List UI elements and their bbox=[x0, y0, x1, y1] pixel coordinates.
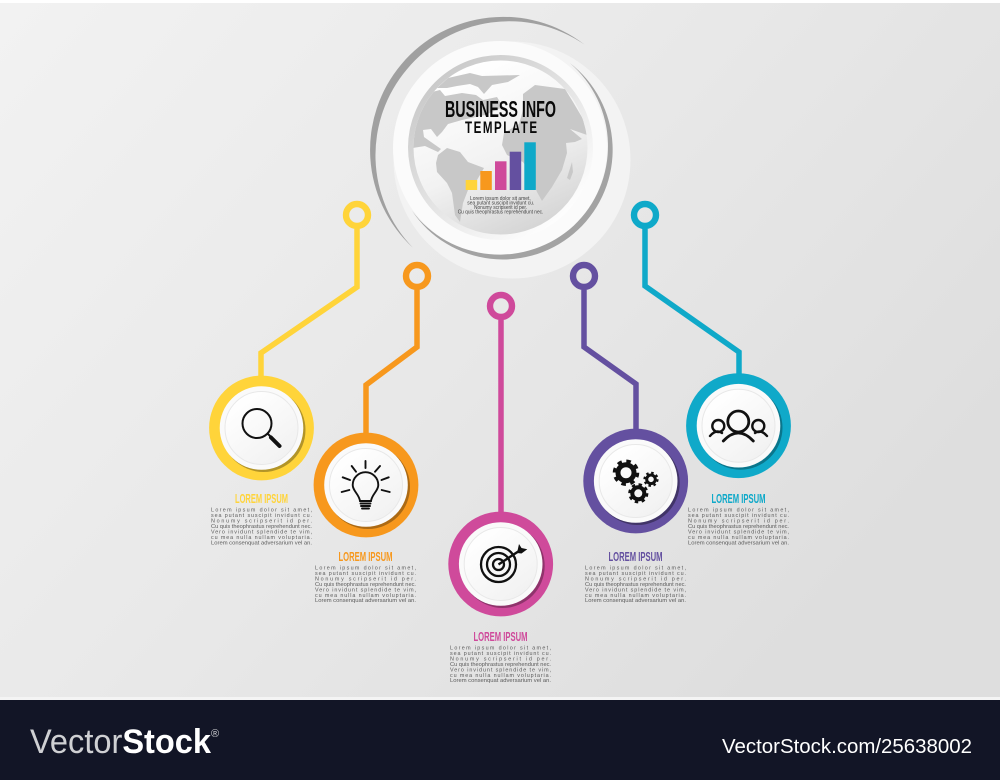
body bbox=[315, 566, 416, 604]
badge text: Lorem ipsum dolor sit amet, bbox=[470, 196, 531, 202]
heading: LOREM IPSUM bbox=[474, 629, 528, 644]
text block: yellow bbox=[211, 491, 312, 546]
body: sea putant suscipit invidunt cu. bbox=[688, 513, 789, 519]
node: purple bbox=[583, 429, 688, 533]
body: cu mea nulla nullam voluptaria. bbox=[450, 673, 551, 679]
badge text: sea putant suscipit invidunt cu. bbox=[467, 200, 534, 206]
body: Lorem consenquat adversarium vel an. bbox=[315, 598, 416, 604]
icon: light bulb bbox=[342, 461, 390, 508]
body: Nonumy scripserit id per. bbox=[315, 576, 416, 582]
body: Cu quis theophrastus reprehendunt nec. bbox=[211, 524, 312, 530]
connector: blue bbox=[634, 204, 739, 376]
body bbox=[688, 508, 790, 546]
body: Vero invidunt splendide te vim, bbox=[315, 587, 416, 593]
body: Vero invidunt splendide te vim, bbox=[585, 587, 686, 593]
body: Lorem ipsum dolor sit amet, bbox=[585, 566, 686, 572]
connector: orange bbox=[366, 265, 428, 435]
body: sea putant suscipit invidunt cu. bbox=[585, 571, 686, 577]
footer logo: VectorStock bbox=[30, 723, 211, 761]
text block: purple bbox=[585, 549, 686, 604]
inner crescent bottom-right bbox=[412, 63, 613, 259]
heading: LOREM IPSUM bbox=[338, 549, 392, 564]
body: Vero invidunt splendide te vim, bbox=[688, 530, 790, 536]
body: Nonumy scripserit id per. bbox=[688, 519, 789, 525]
text block: blue bbox=[688, 491, 790, 546]
body: Cu quis theophrastus reprehendunt nec. bbox=[315, 582, 416, 588]
body: cu mea nulla nullam voluptaria. bbox=[211, 535, 312, 541]
body: Lorem ipsum dolor sit amet, bbox=[688, 508, 790, 514]
bar chart bbox=[466, 142, 536, 190]
connector: purple bbox=[573, 265, 636, 431]
node: pink bbox=[448, 512, 553, 616]
subtitle: TEMPLATE bbox=[465, 119, 537, 138]
badge text bbox=[458, 196, 543, 216]
icon: people bbox=[710, 411, 767, 441]
text block: orange bbox=[315, 549, 416, 604]
body: Cu quis theophrastus reprehendunt nec. bbox=[688, 524, 789, 530]
body: Cu quis theophrastus reprehendunt nec. bbox=[450, 662, 551, 668]
body: Nonumy scripserit id per. bbox=[585, 576, 686, 582]
body bbox=[211, 508, 312, 546]
registered mark: ® bbox=[211, 728, 219, 740]
text block: pink bbox=[450, 629, 552, 684]
icon: magnifier bbox=[242, 409, 280, 446]
footer band bbox=[0, 697, 1000, 780]
body: Lorem consenquat adversarium vel an. bbox=[450, 678, 551, 684]
body: cu mea nulla nullam voluptaria. bbox=[315, 593, 416, 599]
heading: LOREM IPSUM bbox=[235, 491, 288, 506]
body: sea putant suscipit invidunt cu. bbox=[211, 513, 312, 519]
body: sea putant suscipit invidunt cu. bbox=[315, 571, 416, 577]
central globe badge bbox=[370, 17, 630, 279]
badge text: Cu quis theophrastus reprehendunt nec. bbox=[458, 210, 543, 216]
body: Vero invidunt splendide te vim, bbox=[211, 530, 312, 536]
heading: LOREM IPSUM bbox=[712, 491, 766, 506]
body: Lorem consenquat adversarium vel an. bbox=[688, 540, 789, 546]
node: orange bbox=[314, 433, 418, 537]
body bbox=[585, 566, 686, 604]
body: Nonumy scripserit id per. bbox=[211, 519, 312, 525]
body: Lorem consenquat adversarium vel an. bbox=[211, 540, 312, 546]
body: Cu quis theophrastus reprehendunt nec. bbox=[585, 582, 686, 588]
connector: yellow bbox=[261, 204, 368, 378]
body: Lorem ipsum dolor sit amet, bbox=[450, 646, 552, 652]
node: yellow bbox=[209, 376, 314, 480]
body: Lorem ipsum dolor sit amet, bbox=[211, 508, 312, 514]
body: Lorem consenquat adversarium vel an. bbox=[585, 598, 686, 604]
heading: LOREM IPSUM bbox=[608, 549, 662, 564]
icon: gears bbox=[614, 461, 658, 502]
outer crescent top-left bbox=[370, 17, 584, 248]
body: cu mea nulla nullam voluptaria. bbox=[585, 593, 686, 599]
connector: pink bbox=[490, 295, 512, 514]
footer id: VectorStock.com/25638002 bbox=[722, 736, 972, 758]
body: Vero invidunt splendide te vim, bbox=[450, 667, 552, 673]
body: Nonumy scripserit id per. bbox=[450, 656, 551, 662]
icon: target bbox=[481, 544, 527, 582]
node: blue bbox=[686, 373, 791, 478]
body bbox=[450, 646, 552, 684]
body: Lorem ipsum dolor sit amet, bbox=[315, 566, 416, 572]
body: cu mea nulla nullam voluptaria. bbox=[688, 535, 789, 541]
world map bbox=[400, 73, 587, 222]
badge text: Nonumy scripserit id per. bbox=[474, 205, 527, 211]
title: BUSINESS INFO bbox=[445, 96, 556, 122]
body: sea putant suscipit invidunt cu. bbox=[450, 651, 551, 657]
